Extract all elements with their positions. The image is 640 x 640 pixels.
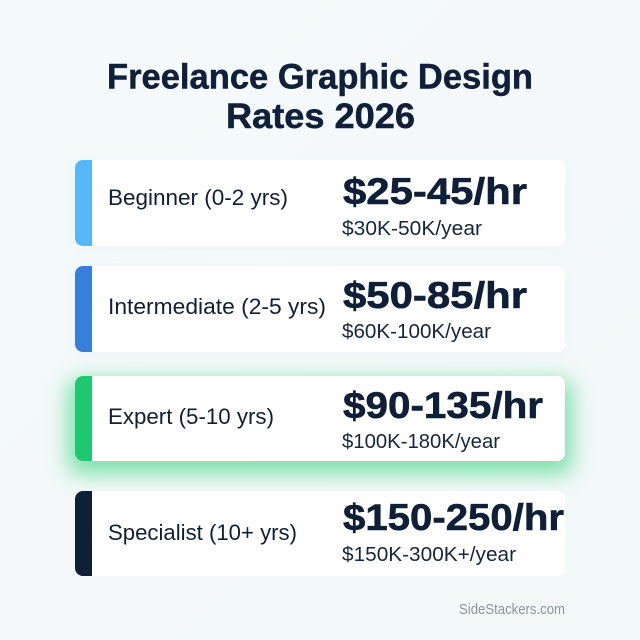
annual rate: beginner: $30K-50K/year [342,218,482,240]
hourly rate: specialist: $150-250/hr [343,496,564,538]
annual rate: expert: $100K-180K/year [342,431,500,453]
hourly rate: expert: $90-135/hr [343,384,543,426]
accent bar: expert [75,376,92,461]
panel: expert (highlighted) [68,376,572,474]
footer: source: SideStackers.com [459,602,565,618]
label: expert: Expert (5-10 yrs) [108,404,274,429]
annual rate: intermediate: $60K-100K/year [342,321,491,343]
panel: beginner [75,160,565,248]
label: intermediate: Intermediate (2-5 yrs) [108,294,326,319]
accent bar: beginner [75,160,92,246]
title: Rates 2026 [226,97,415,136]
title: Freelance Graphic Design [107,58,533,96]
annual rate: specialist: $150K-300K+/year [342,544,516,566]
accent bar: specialist [75,491,92,576]
label: specialist: Specialist (10+ yrs) [108,520,297,545]
panel: intermediate [75,266,565,354]
hourly rate: beginner: $25-45/hr [343,170,527,212]
title [107,58,533,136]
accent bar: intermediate [75,266,92,352]
hourly rate: intermediate: $50-85/hr [343,274,527,316]
label: beginner: Beginner (0-2 yrs) [108,185,288,210]
panel: specialist [75,491,565,576]
